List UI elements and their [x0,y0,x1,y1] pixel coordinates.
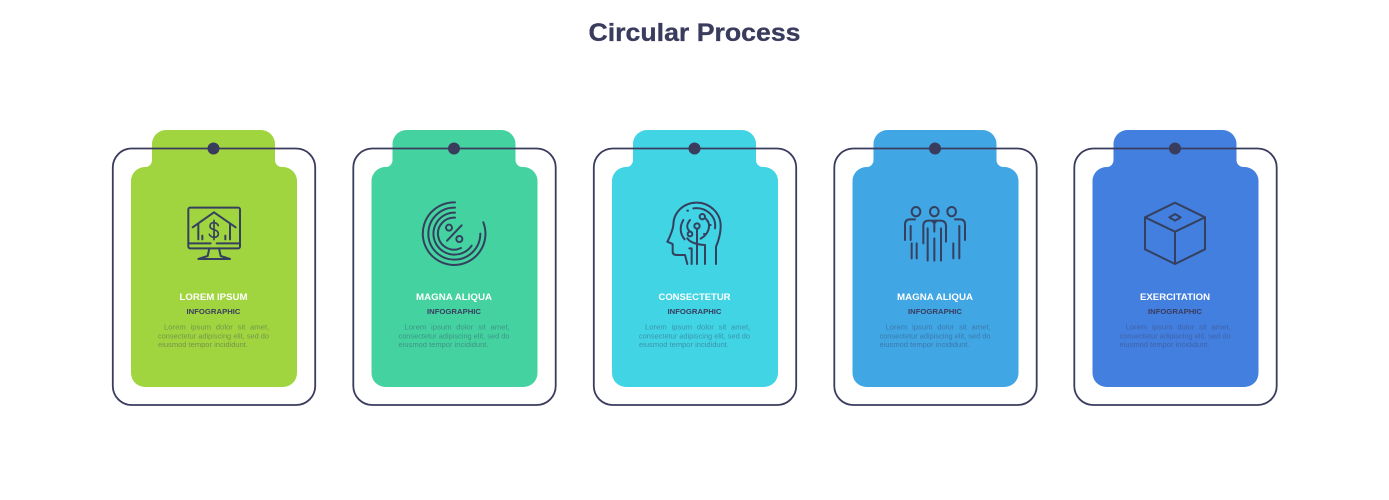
outline frame [1074,148,1277,405]
description: Lorem ipsum dolor sit amet, [645,322,750,332]
title: Circular Process [588,19,800,47]
coloured tab shape [612,130,778,387]
heading: MAGNA ALIQUA [897,292,973,303]
connector dot [448,142,460,154]
panel: card 1 lorem ipsum [113,130,315,405]
icon: house on monitor [188,208,240,259]
icon: percent radial [423,202,485,265]
description: eiusmod tempor incididunt. [158,340,248,349]
description: eiusmod tempor incididunt. [880,340,970,349]
subheading: INFOGRAPHIC [1148,307,1203,316]
heading: LOREM IPSUM [180,292,248,303]
icon: cube [1145,203,1205,264]
connector dot [1169,142,1181,154]
coloured tab shape [852,130,1018,387]
connector dot [929,142,941,154]
description: consectetur adipiscing elit, sed do [1120,332,1230,340]
coloured tab shape [1092,130,1258,387]
description: eiusmod tempor incididunt. [1120,340,1210,349]
description: consectetur adipiscing elit, sed do [158,332,269,340]
description: Lorem ipsum dolor sit amet, [164,322,269,332]
heading: EXERCITATION [1140,292,1210,303]
coloured tab shape [131,130,297,387]
connector dot [208,142,220,154]
panel: card 5 exercitation [1074,130,1277,405]
description: consectetur adipiscing elit, sed do [880,332,990,340]
description: consectetur adipiscing elit, sed do [639,332,750,340]
icon: three people [905,207,965,261]
coloured tab shape [372,130,538,387]
outline frame [594,148,796,405]
description: eiusmod tempor incididunt. [398,340,488,349]
heading: CONSECTETUR [658,292,731,303]
connector dot [688,142,700,154]
panel: card 2 magna aliqua [353,130,556,405]
heading: MAGNA ALIQUA [416,292,492,303]
outline frame [353,148,556,405]
description: eiusmod tempor incididunt. [639,340,729,349]
description: Lorem ipsum dolor sit amet, [404,322,510,332]
description: Lorem ipsum dolor sit amet, [1126,322,1231,332]
subheading: INFOGRAPHIC [186,307,241,316]
panel: card 4 magna aliqua [834,130,1037,405]
icon: head with circuit [667,203,721,264]
outline frame [113,148,315,405]
description: consectetur adipiscing elit, sed do [398,332,510,340]
subheading: INFOGRAPHIC [908,307,963,316]
outline frame [834,148,1037,405]
subheading: INFOGRAPHIC [668,307,722,316]
panel: card 3 consectetur [594,130,796,405]
subheading: INFOGRAPHIC [427,307,482,316]
description: Lorem ipsum dolor sit amet, [886,322,991,332]
